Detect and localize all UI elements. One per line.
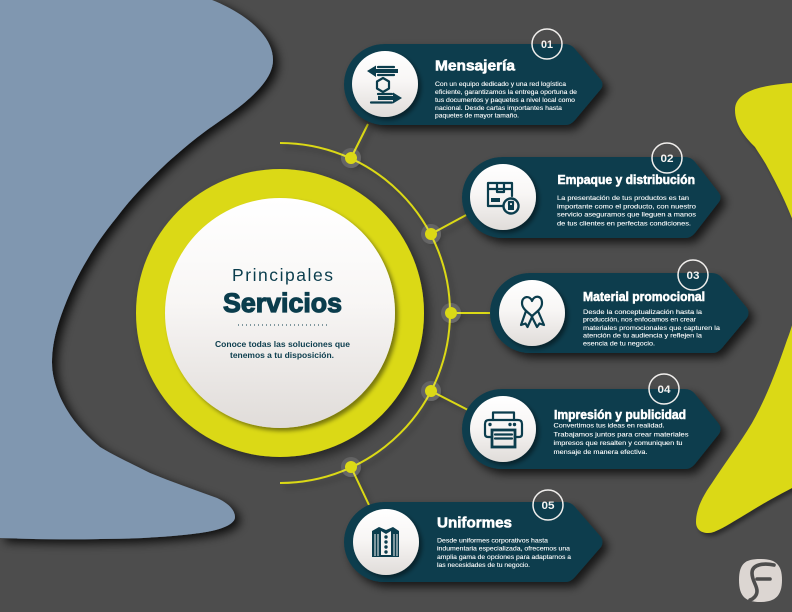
description: esencia de tu negocio. (583, 340, 655, 348)
description: indumentaria especializada, ofrecemos una (437, 546, 570, 552)
central yellow ring (136, 169, 424, 457)
badge 01 (532, 29, 562, 59)
description: tus documentos y paquetes a nivel local como (435, 97, 575, 104)
subtitle: Conoce todas las soluciones que (215, 339, 350, 349)
white circle (352, 51, 418, 117)
heading: Uniformes (437, 514, 512, 532)
title: Principales: Principales (232, 265, 333, 285)
description: producción, nos enfocamos en crear (583, 316, 697, 324)
badge 05: 05 (542, 500, 554, 512)
blue organic shape (0, 0, 273, 539)
description: Con un equipo dedicado y una red logística (435, 81, 566, 88)
description: eficiente, garantizamos la entrega oportuna de (435, 89, 577, 96)
description: atención de tu audiencia y reflejen la (583, 332, 702, 340)
card 01: Mensajería (344, 29, 602, 125)
heading: Impresión y publicidad (554, 407, 686, 422)
white circle (499, 280, 565, 346)
card 02: Empaque y distribución (462, 143, 720, 238)
badge 03: 03 (686, 270, 700, 282)
description: importante como el producto, con nuestro (557, 204, 696, 210)
icon: ribbon heart (521, 297, 544, 327)
yellow organic shape (696, 83, 792, 533)
icon: delivery arrows (367, 66, 402, 104)
description (435, 81, 577, 120)
description: de tus clientes en perfectas condiciones. (557, 220, 691, 228)
description: las necesidades de tu negocio. (437, 562, 530, 569)
card 03: Material promocional (490, 260, 748, 353)
logo mark (739, 559, 782, 602)
badge 02 (652, 143, 682, 173)
heading: Material promocional (583, 289, 705, 304)
badge 01: 01 (541, 39, 553, 51)
connector arc and nodes (280, 124, 492, 505)
description: nacional. Desde cartas importantes hasta (435, 105, 562, 112)
icon: package with lock (488, 183, 518, 214)
description: servicio aseguramos que lleguen a manos (557, 212, 697, 218)
badge 04: 04 (658, 384, 671, 396)
description (583, 309, 720, 348)
white circle (470, 164, 536, 230)
central white disc with title (165, 198, 395, 428)
icon: printer (485, 412, 522, 447)
description: Desde la conceptualización hasta la (583, 309, 702, 316)
description (557, 195, 697, 228)
badge 02: 02 (660, 153, 674, 165)
description (437, 538, 571, 569)
subtitle: tenemos a tu disposición. (230, 350, 334, 360)
icon: uniform shirt (372, 527, 399, 557)
white circle (353, 509, 419, 575)
description: Desde uniformes corporativos hasta (437, 538, 548, 544)
badge 04 (649, 374, 679, 404)
description: mensaje de manera efectiva. (554, 449, 648, 456)
description: Convertimos tus ideas en realidad. (554, 422, 665, 430)
badge 05 (533, 490, 563, 520)
white circle (470, 396, 536, 462)
badge 03 (678, 260, 708, 290)
subtitle (215, 339, 350, 360)
description: amplia gama de opciones para adaptarnos a (437, 554, 571, 561)
description: paquetes de mayor tamaño. (435, 112, 519, 120)
heading: Empaque y distribución (558, 172, 695, 187)
heading: Mensajería (435, 58, 516, 74)
card 05: Uniformes (344, 490, 602, 582)
card 04: Impresión y publicidad (462, 374, 720, 469)
description: materiales promocionales que capturen la (583, 325, 720, 332)
description: La presentación de tus productos es tan (557, 195, 689, 202)
description: Trabajamos juntos para crear materiales (554, 432, 689, 438)
title: Servicios: Servicios (223, 288, 342, 318)
description: impresos que resalten y comuniquen tu (554, 440, 683, 447)
description (554, 422, 689, 456)
